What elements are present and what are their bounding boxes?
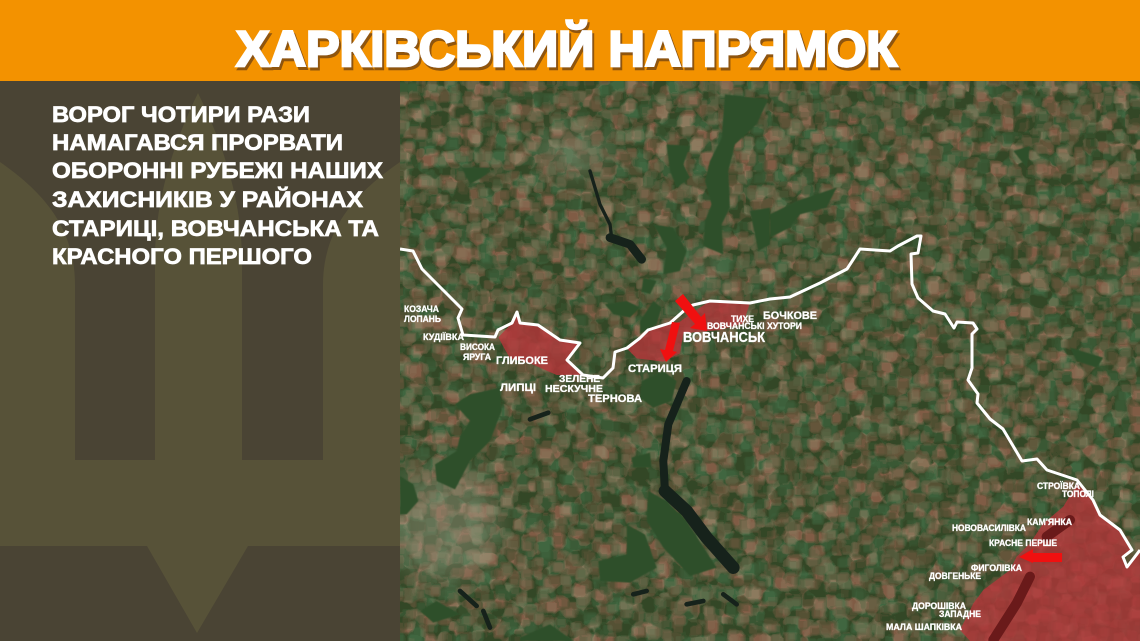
map labels: settlements: ДОВГЕНЬКЕ: [929, 571, 981, 581]
header bar: [0, 0, 1140, 81]
map labels: settlements: БОЧКОВЕ: [763, 310, 817, 322]
map labels: settlements: ТИХЕ: [731, 314, 754, 324]
text block: summary: [52, 102, 383, 269]
map labels: settlements: ЗЕЛЕНЕ: [559, 374, 600, 385]
occupied area: Krasne Pershe: [960, 483, 1140, 641]
panel: satellite map: [390, 81, 1140, 641]
rivers and reservoirs: [460, 171, 737, 628]
map labels: settlements: ЗАПАДНЕ: [939, 609, 981, 619]
arrow: attack on Starytsia: [660, 322, 680, 362]
map labels: settlements: КОЗАЧА: [404, 304, 439, 314]
map labels: settlements: [404, 304, 1094, 632]
map labels: settlements: ВОВЧАНСЬКІ ХУТОРИ: [707, 321, 802, 331]
map labels: settlements: КАМ'ЯНКА: [1027, 517, 1072, 527]
text block: summary: КРАСНОГО ПЕРШОГО: [52, 244, 312, 269]
panel: left text panel: [0, 81, 400, 641]
map labels: settlements: НОВОВАСИЛІВКА: [952, 523, 1026, 533]
front line: [400, 236, 1140, 567]
map labels: settlements: КРАСНЕ ПЕРШЕ: [989, 538, 1057, 548]
occupied area: Starytsia and Vovchansk: [627, 301, 750, 362]
title: ХАРКІВСЬКИЙ НАПРЯМОК: [236, 20, 897, 77]
map labels: settlements: СТРОЇВКА: [1037, 481, 1080, 491]
map labels: settlements: КУДІЇВКА: [423, 332, 464, 342]
map labels: settlements: ДОРОШІВКА: [912, 601, 966, 611]
text block: summary: ЗАХИСНИКІВ У РАЙОНАХ: [52, 187, 363, 212]
map labels: settlements: ВОВЧАНСЬК: [683, 330, 765, 346]
map labels: settlements: ЛИПЦІ: [500, 382, 536, 394]
map labels: settlements: ФИГОЛІВКА: [971, 563, 1022, 573]
text block: summary: ОБОРОННІ РУБЕЖІ НАШИХ: [52, 158, 383, 183]
arrow: attack on Krasne Pershe: [1019, 549, 1062, 563]
map labels: settlements: НЕСКУЧНЕ: [545, 384, 603, 395]
map labels: settlements: ЯРУГА: [463, 352, 491, 362]
map labels: settlements: ВИСОКА: [460, 342, 495, 352]
map labels: settlements: СТАРИЦЯ: [628, 363, 682, 375]
map labels: settlements: МАЛА ШАПКІВКА: [886, 622, 962, 632]
text block: summary: СТАРИЦІ, ВОВЧАНСЬКА ТА: [52, 216, 379, 241]
arrow: attack on Vovchansk: [675, 294, 707, 331]
map labels: settlements: ТЕРНОВА: [588, 393, 642, 405]
occupied area: Hlyboke: [498, 312, 582, 375]
map labels: settlements: ЛОПАНЬ: [404, 314, 441, 324]
trident emblem watermark: [0, 93, 400, 633]
map labels: settlements: ТОПОЛІ: [1062, 489, 1094, 499]
text block: summary: ВОРОГ ЧОТИРИ РАЗИ: [52, 102, 310, 127]
map labels: settlements: ГЛИБОКЕ: [496, 355, 548, 367]
text block: summary: НАМАГАВСЯ ПРОРВАТИ: [52, 130, 343, 155]
